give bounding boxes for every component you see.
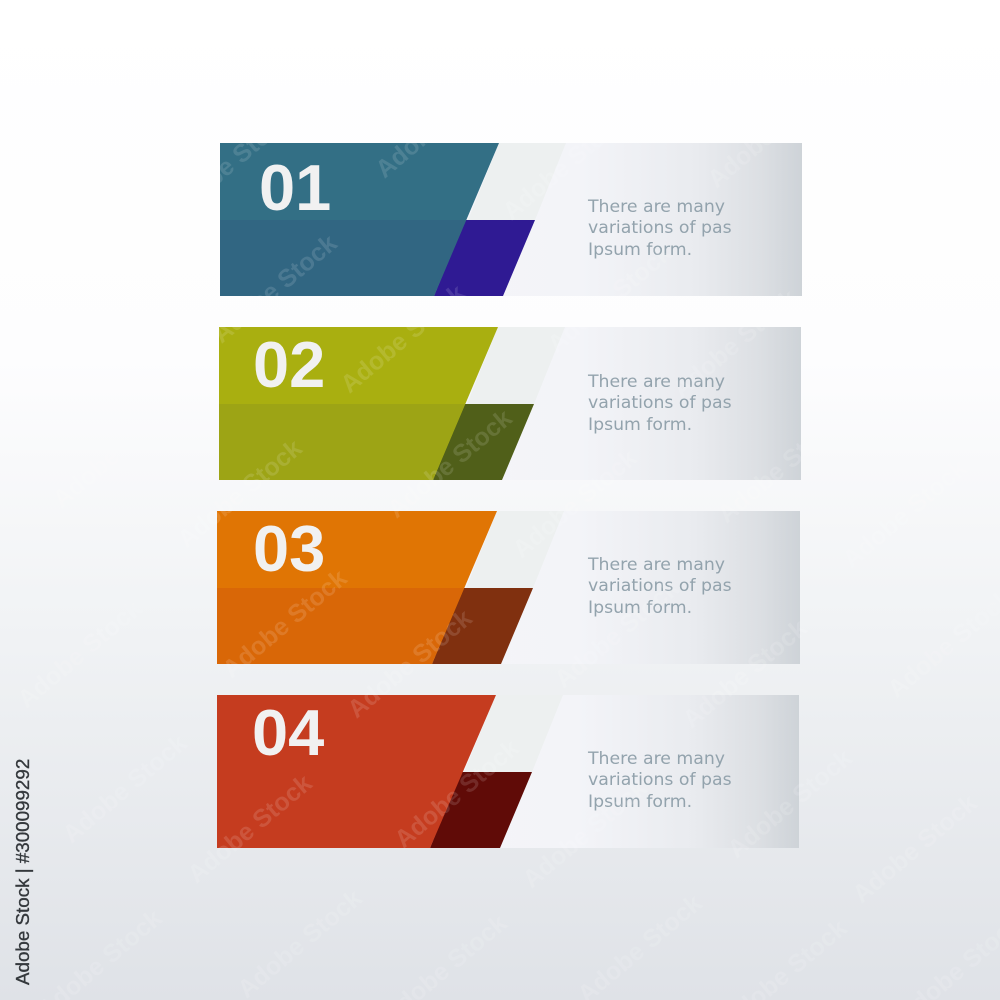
panel: step 01 — [220, 143, 802, 296]
watermark pattern: Adobe Stock — [207, 229, 342, 349]
watermark pattern: Adobe Stock — [217, 564, 352, 684]
colour block lower shade — [219, 404, 465, 480]
watermark pattern: Adobe Stock — [382, 404, 517, 524]
description: Ipsum form. — [588, 240, 692, 260]
panel: step 03 — [217, 511, 800, 664]
watermark pattern: Adobe Stock — [837, 454, 972, 574]
watermark pattern: Adobe Stock — [342, 604, 477, 724]
watermark pattern: Adobe Stock — [827, 119, 962, 239]
panel: step 02 — [219, 327, 801, 480]
colour block lower shade — [220, 220, 466, 296]
number: 03 — [253, 512, 325, 585]
light fold — [467, 327, 565, 404]
description: There are many — [588, 197, 725, 217]
watermark pattern: Adobe Stock — [507, 444, 642, 564]
light fold — [468, 143, 566, 220]
watermark pattern: Adobe Stock — [389, 734, 524, 854]
number: 01 — [259, 151, 331, 224]
description: variations of pas — [588, 218, 732, 238]
light fold — [464, 695, 563, 772]
watermark pattern: Adobe Stock — [162, 104, 297, 224]
card background — [220, 143, 802, 296]
watermark pattern: Adobe Stock — [847, 789, 982, 909]
watermark pattern: Adobe Stock — [172, 434, 307, 554]
card background — [219, 327, 801, 480]
watermark pattern: Adobe Stock — [702, 74, 837, 194]
description: There are many — [588, 555, 725, 575]
description: Ipsum form. — [588, 792, 692, 812]
dark fold — [430, 772, 532, 848]
watermark pattern: Adobe Stock — [182, 769, 317, 889]
watermark pattern: Adobe Stock — [57, 729, 192, 849]
panel: step 04 — [217, 695, 799, 848]
description: Ipsum form. — [588, 598, 692, 618]
watermark pattern: Adobe Stock — [517, 774, 652, 894]
colour block — [219, 327, 498, 480]
dark fold — [433, 404, 534, 480]
colour block — [217, 511, 497, 664]
number: 04 — [252, 696, 324, 769]
watermark pattern: Adobe Stock — [677, 614, 812, 734]
description: Ipsum form. — [588, 415, 692, 435]
colour block — [220, 143, 499, 296]
card background — [217, 511, 800, 664]
description: variations of pas — [588, 576, 732, 596]
description: There are many — [588, 749, 725, 769]
number: 02 — [253, 328, 325, 401]
description: variations of pas — [588, 393, 732, 413]
description: variations of pas — [588, 770, 732, 790]
light fold — [466, 511, 564, 588]
watermark pattern: Adobe Stock — [47, 394, 182, 514]
stock id side label: Adobe Stock | #300099292 — [12, 759, 33, 985]
watermark pattern: Adobe Stock — [549, 574, 684, 694]
watermark pattern: Adobe Stock — [335, 279, 470, 399]
watermark pattern: Adobe Stock — [667, 284, 802, 404]
watermark pattern: Adobe Stock — [722, 744, 857, 864]
watermark pattern: Adobe Stock — [37, 59, 172, 179]
dark fold — [434, 220, 535, 296]
watermark pattern: Adobe Stock — [542, 239, 677, 359]
watermark pattern: Adobe Stock — [12, 594, 147, 714]
description: There are many — [588, 372, 725, 392]
watermark pattern: Adobe Stock — [497, 106, 632, 226]
watermark pattern: Adobe Stock — [2, 264, 137, 384]
dark fold — [432, 588, 533, 664]
card background — [217, 695, 799, 848]
colour block — [217, 695, 496, 848]
watermark pattern: Adobe Stock — [370, 64, 505, 184]
watermark pattern: Adobe Stock — [712, 409, 847, 529]
colour block lower shade — [217, 588, 464, 664]
